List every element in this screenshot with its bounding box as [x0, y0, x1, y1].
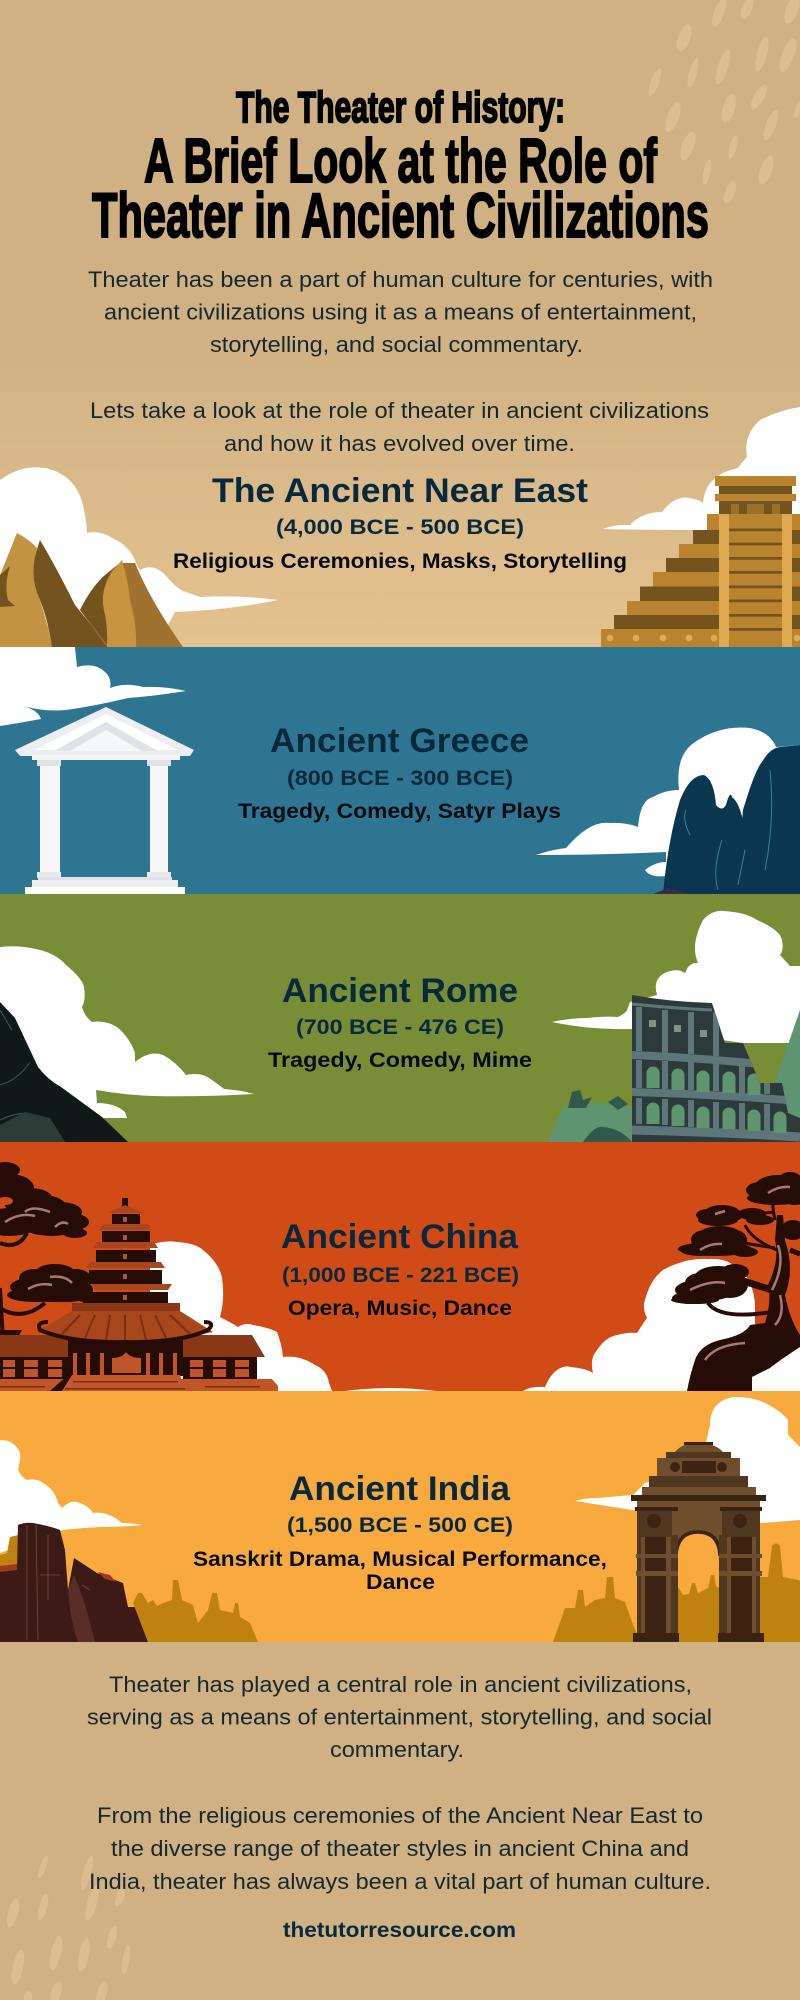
forms of theater: Opera, Music, Dance	[288, 1297, 512, 1320]
heading: Ancient India	[289, 1470, 511, 1508]
website: thetutorresource.com	[283, 1919, 516, 1942]
cloud: greece left	[0, 647, 186, 726]
band background	[0, 647, 800, 894]
icon: temple silhouettes right	[553, 1544, 800, 1642]
heading: Ancient Greece	[270, 722, 529, 760]
intro text	[88, 267, 713, 456]
icon: green hills	[548, 1010, 800, 1142]
cloud: india left	[0, 1440, 143, 1553]
cloud: near east right	[603, 407, 800, 530]
cloud: greece right	[536, 728, 800, 893]
icon: rock towers	[0, 1523, 148, 1642]
conclusion text: serving as a means of entertainment, storytelling, and social	[87, 1704, 712, 1730]
intro text: storytelling, and social commentary.	[210, 332, 583, 357]
intro text: ancient civilizations using it as a means of entertainment,	[104, 300, 697, 324]
background: sand	[0, 0, 800, 647]
forms of theater: Dance	[366, 1571, 435, 1594]
icon: india gate	[631, 1442, 766, 1642]
panel: conclusion	[0, 1642, 800, 2000]
panel: ancient rome	[0, 894, 800, 1145]
conclusion text	[87, 1672, 712, 1894]
icon: mountains	[0, 533, 183, 647]
conclusion text: the diverse range of theater styles in ancient China and	[111, 1836, 689, 1861]
band background	[0, 1642, 800, 2000]
cloud: near east left	[0, 467, 278, 625]
forms of theater: Tragedy, Comedy, Satyr Plays	[238, 800, 561, 823]
intro text: Lets take a look at the role of theater in ancient civilizations	[90, 398, 709, 423]
panel: ancient china	[0, 1142, 800, 1391]
cloud: rome right	[552, 911, 800, 1043]
conclusion text: India, theater has always been a vital part of human culture.	[89, 1869, 711, 1894]
cloud: india right	[575, 1397, 800, 1523]
dates: (4,000 BCE - 500 BCE)	[276, 516, 524, 539]
conclusion text: Theater has played a central role in ancient civilizations,	[109, 1672, 692, 1697]
icon: colosseum	[632, 990, 800, 1145]
band background	[0, 1391, 800, 1642]
forms of theater: Sanskrit Drama, Musical Performance,	[193, 1548, 607, 1571]
dates: (1,000 BCE - 221 BCE)	[282, 1264, 519, 1287]
heading: Ancient Rome	[282, 972, 518, 1010]
icon: sea cliffs	[653, 745, 800, 894]
icon: dark mountain	[0, 1002, 128, 1142]
conclusion text: commentary.	[330, 1737, 464, 1762]
panel: ancient india	[0, 1391, 800, 1642]
dates: (1,500 BCE - 500 CE)	[287, 1514, 513, 1537]
heading: The Ancient Near East	[212, 472, 588, 510]
title	[92, 83, 709, 251]
band background	[0, 1142, 800, 1391]
band background	[0, 894, 800, 1142]
title: The Theater of History:	[236, 83, 565, 132]
icon: step pyramid	[601, 476, 800, 647]
forms of theater: Tragedy, Comedy, Mime	[268, 1049, 532, 1072]
intro text: and how it has evolved over time.	[224, 431, 575, 456]
forms of theater	[193, 1548, 607, 1594]
cloud wisps: china bottom	[345, 1388, 565, 1391]
heading: Ancient China	[281, 1218, 519, 1256]
panel: ancient near east	[0, 407, 800, 647]
icon: temple silhouettes left	[133, 1580, 258, 1642]
decoration: drops bottom left	[4, 1855, 132, 2000]
conclusion text: From the religious ceremonies of the Ancient Near East to	[97, 1803, 703, 1828]
icon: pagoda temple	[0, 1198, 278, 1391]
dates: (700 BCE - 476 CE)	[296, 1016, 504, 1039]
intro text: Theater has been a part of human culture for centuries, with	[88, 267, 713, 292]
forms of theater: Religious Ceremonies, Masks, Storytelling	[173, 550, 627, 573]
dates: (800 BCE - 300 BCE)	[287, 767, 513, 790]
decoration: drops top right	[646, 0, 800, 205]
cloud: rome left	[0, 946, 254, 1130]
icon: greek temple	[15, 707, 194, 894]
cloud: china right	[523, 1259, 800, 1391]
icon: pine tree left	[0, 1162, 95, 1352]
cloud: china left	[150, 1241, 332, 1391]
icon: pine tree right	[671, 1172, 800, 1391]
panel: ancient greece	[0, 647, 800, 894]
